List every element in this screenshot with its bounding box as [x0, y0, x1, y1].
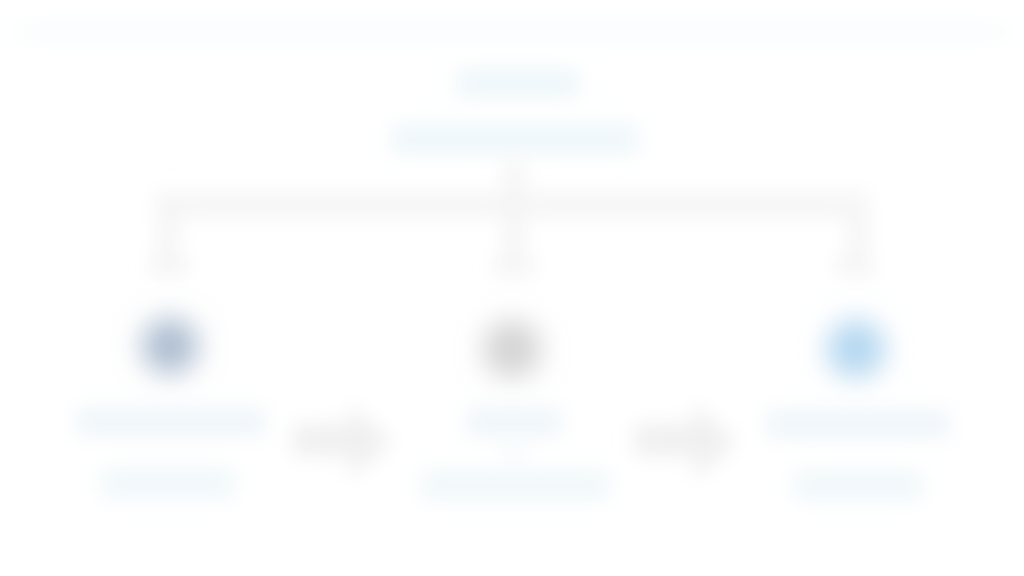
- top band: [15, 24, 1010, 40]
- middle node: [421, 320, 610, 500]
- title: [456, 68, 580, 98]
- middle heading: [466, 407, 562, 437]
- right node: [766, 320, 950, 501]
- arrow: left to middle: [293, 404, 392, 480]
- left heading: [76, 407, 266, 437]
- right caption: [794, 470, 923, 501]
- icon: left circle: [142, 318, 198, 374]
- middle caption: [421, 470, 610, 500]
- icon: right circle: [827, 320, 885, 378]
- left node: [76, 318, 266, 499]
- connector tree: [150, 158, 874, 276]
- right heading: [766, 409, 950, 439]
- icon: middle circle: [483, 320, 541, 378]
- left caption: [101, 468, 235, 499]
- subtitle: [391, 124, 639, 154]
- middle connector word: [500, 444, 530, 459]
- arrow: middle to right: [635, 404, 737, 480]
